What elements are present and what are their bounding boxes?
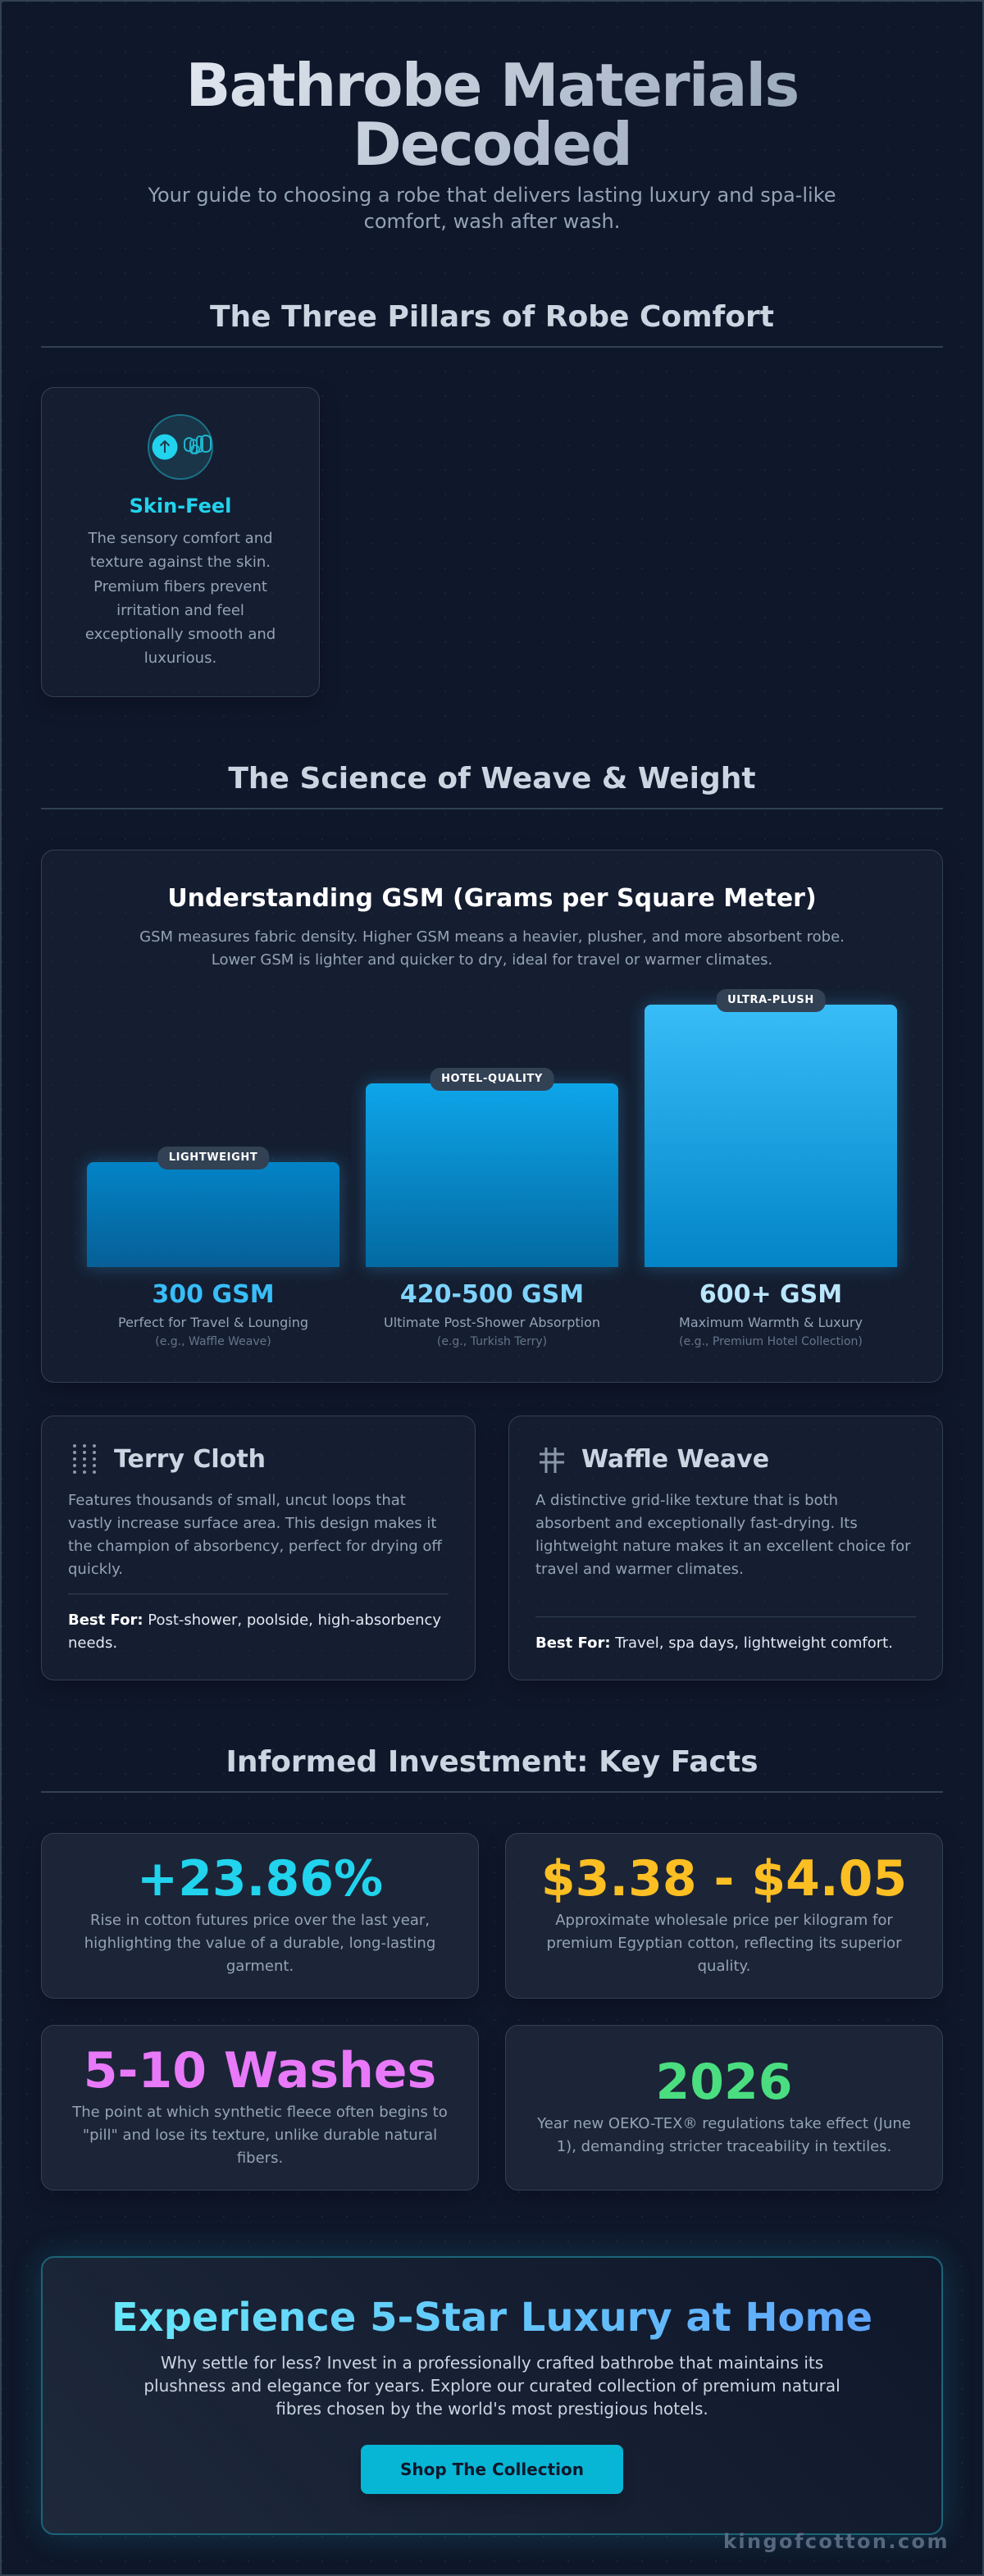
text: terry description	[68, 1492, 443, 1578]
description: quality.	[698, 1958, 750, 1975]
description: Rise in cotton futures price over the last year,	[90, 1912, 430, 1929]
text: skin-feel description	[85, 530, 276, 667]
value: 5-10 Washes	[84, 2042, 436, 2100]
caption: Ultimate Post-Shower Absorption	[384, 1315, 600, 1330]
value: 2026	[656, 2054, 792, 2111]
chart column: 600+ gsm	[636, 989, 905, 1348]
text: gsm description	[139, 928, 845, 969]
text: skin-feel description: luxurious.	[144, 650, 216, 667]
button: shop the collection: Shop The Collection	[400, 2460, 584, 2479]
description: garment.	[226, 1958, 294, 1975]
text: gsm description: GSM measures fabric density. Higher GSM means a heavier, plusher, and more absorbent robe.	[139, 928, 845, 946]
description: premium Egyptian cotton, reflecting its superior	[547, 1935, 901, 1952]
description: "pill" and lose its texture, unlike durable natural	[83, 2127, 437, 2144]
text: waffle description: A distinctive grid-like texture that is both	[535, 1492, 838, 1509]
heading: skin-feel: Skin-Feel	[130, 495, 231, 517]
description	[547, 1912, 902, 1975]
heading: waffle weave: Waffle Weave	[581, 1445, 769, 1474]
description: Approximate wholesale price per kilogram for	[555, 1912, 893, 1929]
description: 1), demanding stricter traceability in textiles.	[557, 2138, 891, 2155]
text: skin-feel description: texture against the skin.	[90, 554, 271, 571]
text: terry best for	[68, 1612, 441, 1652]
heading: science of weave	[41, 760, 943, 809]
panel: gsm explainer	[41, 850, 943, 1383]
text: terry best for: needs.	[68, 1635, 117, 1652]
text: waffle description: travel and warmer climates.	[535, 1561, 744, 1578]
text: cta body: fibres chosen by the world's most prestigious hotels.	[276, 2399, 708, 2419]
heading: three pillars	[41, 299, 943, 348]
text: terry description: quickly.	[68, 1561, 123, 1578]
stat: fleece pilling	[41, 2025, 479, 2191]
value: $3.38 - $4.05	[541, 1850, 907, 1908]
bar: 420-500 gsm	[366, 1083, 618, 1267]
chart column: 300 gsm	[79, 1147, 348, 1348]
title: Bathrobe Materials	[186, 51, 798, 120]
panel: waffle weave	[508, 1416, 943, 1680]
icon: terry loops	[73, 1444, 96, 1474]
description: Year new OEKO-TEX® regulations take effect (June	[537, 2115, 911, 2132]
caption: Perfect for Travel & Lounging	[118, 1315, 308, 1330]
heading: gsm: Understanding GSM (Grams per Square Meter)	[167, 884, 817, 913]
panel: terry cloth	[41, 1416, 476, 1680]
stat: cotton futures	[41, 1833, 479, 1999]
text: terry best for: Best For: Post-shower, poolside, high-absorbency	[68, 1612, 441, 1629]
button: shop the collection	[361, 2445, 623, 2494]
text: skin-feel description: irritation and feel	[116, 602, 244, 619]
value: 300 gsm: 300 GSM	[152, 1280, 275, 1309]
badge: ultra-plush: ULTRA-PLUSH	[727, 994, 814, 1006]
heading: key facts: Informed Investment: Key Facts	[226, 1745, 758, 1779]
divider	[535, 1616, 916, 1617]
panel: call to action	[41, 2256, 943, 2535]
badge: hotel-quality	[430, 1068, 554, 1091]
subtitle: comfort, wash after wash.	[364, 210, 620, 233]
example: (e.g., Turkish Terry)	[437, 1335, 547, 1348]
subtitle: Your guide to choosing a robe that delivers lasting luxury and spa-like	[148, 184, 836, 207]
panel: skin-feel card	[41, 387, 320, 697]
badge: lightweight: LIGHTWEIGHT	[169, 1151, 257, 1164]
text: terry description: Features thousands of small, uncut loops that	[68, 1492, 406, 1509]
value: 420-500 gsm: 420-500 GSM	[400, 1280, 584, 1309]
example: (e.g., Waffle Weave)	[155, 1335, 271, 1348]
text: cta body: Why settle for less? Invest in a professionally crafted bathrobe that maintains its	[161, 2353, 823, 2373]
text: gsm description: Lower GSM is lighter and quicker to dry, ideal for travel or warmer climates.	[212, 951, 772, 969]
text: skin-feel description: exceptionally smooth and	[85, 626, 276, 643]
example: (e.g., Premium Hotel Collection)	[679, 1335, 863, 1348]
heading: cta: Experience 5-Star Luxury at Home	[112, 2295, 872, 2341]
icon: waffle grid	[540, 1448, 564, 1473]
heading: terry cloth: Terry Cloth	[114, 1445, 266, 1474]
heading: three pillars: The Three Pillars of Robe Comfort	[210, 300, 774, 334]
icon: skin-feel badge	[148, 414, 213, 480]
value: 600+ gsm: 600+ GSM	[699, 1280, 842, 1309]
text: cta body	[144, 2353, 840, 2419]
heading: key facts	[41, 1744, 943, 1793]
title: Decoded	[353, 110, 631, 179]
text: skin-feel description: The sensory comfort and	[88, 530, 273, 547]
value: +23.86%	[137, 1850, 383, 1908]
chart column: 420-500 gsm	[358, 1068, 626, 1348]
text: waffle description: lightweight nature makes it an excellent choice for	[535, 1538, 911, 1555]
description: highlighting the value of a durable, long-lasting	[84, 1935, 435, 1952]
description	[72, 2104, 448, 2167]
text: cta body: plushness and elegance for years. Explore our curated collection of premium natural	[144, 2376, 840, 2396]
badge: ultra-plush	[717, 989, 825, 1012]
subtitle	[148, 184, 836, 233]
heading: science of weave: The Science of Weave & Weight	[228, 762, 756, 796]
description	[84, 1912, 435, 1975]
text: waffle description: absorbent and exceptionally fast-drying. Its	[535, 1515, 858, 1532]
description	[537, 2115, 911, 2155]
title	[186, 51, 798, 179]
text: terry description: vastly increase surface area. This design makes it	[68, 1515, 436, 1532]
stat: oeko-tex year	[505, 2025, 943, 2191]
divider	[68, 1593, 449, 1594]
caption: Maximum Warmth & Luxury	[679, 1315, 863, 1330]
text: waffle description	[535, 1492, 911, 1578]
text: terry description: the champion of absorbency, perfect for drying off	[68, 1538, 442, 1555]
text: waffle best for: Best For: Travel, spa days, lightweight comfort.	[535, 1635, 893, 1652]
bar: 600+ gsm	[645, 1005, 897, 1267]
badge: hotel-quality: HOTEL-QUALITY	[441, 1073, 543, 1085]
badge: lightweight	[157, 1147, 269, 1169]
description: fibers.	[237, 2150, 283, 2167]
text: skin-feel description: Premium fibers prevent	[93, 577, 267, 595]
watermark: kingofcotton.com	[723, 2530, 950, 2553]
stat: egyptian cotton price	[505, 1833, 943, 1999]
description: The point at which synthetic fleece often begins to	[72, 2104, 448, 2121]
bar: 300 gsm	[87, 1162, 339, 1267]
